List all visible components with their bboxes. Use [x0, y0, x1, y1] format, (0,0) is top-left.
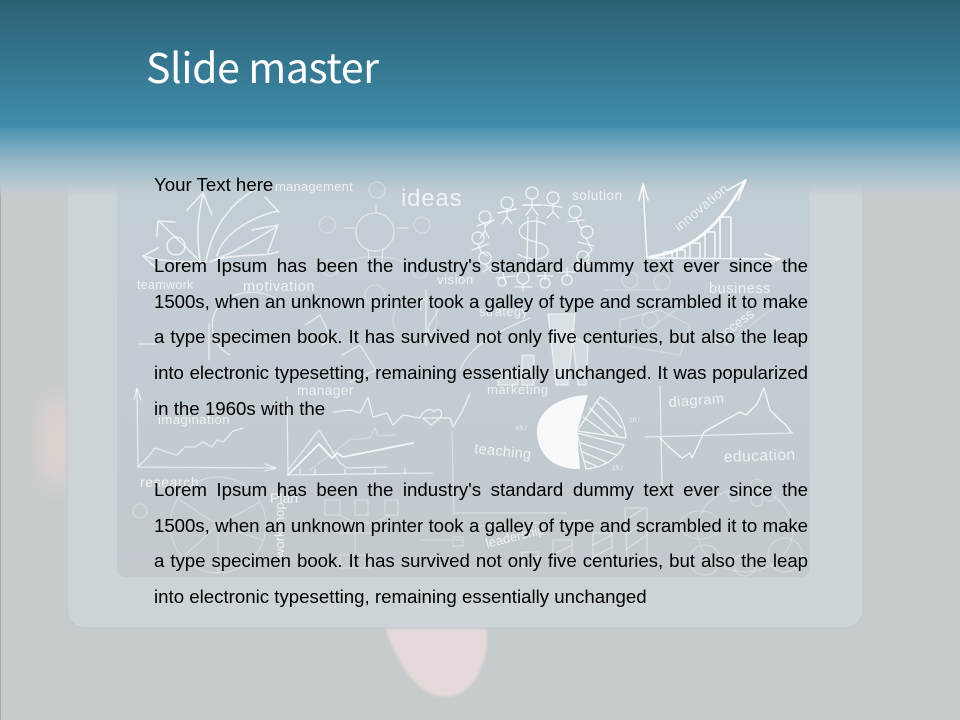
- doodle: pie chart: [537, 395, 626, 469]
- doodle labels: [137, 179, 796, 559]
- doodle labels: business: [709, 281, 771, 297]
- paragraph 1: 1500s, when an unknown printer took a galley of type and scrambled it to make: [154, 291, 808, 312]
- doodle: small charts upper right: [605, 272, 793, 355]
- doodle labels: diagram: [668, 391, 725, 411]
- doodle: innovation growth chart: [639, 180, 780, 264]
- doodle labels: innovation: [671, 181, 731, 234]
- body text block: [154, 174, 808, 607]
- paragraph 1: into electronic typesetting, remaining essentially unchanged. It was popularized: [154, 362, 808, 383]
- paragraph 1: [154, 255, 808, 419]
- left edge line: [0, 127, 1, 720]
- paragraph 1: in the 1960s with the: [154, 398, 325, 419]
- doodle: heartbeat: [333, 393, 470, 427]
- doodle labels: strategy: [479, 304, 529, 319]
- subheading: Your Text here: [154, 174, 273, 195]
- tablet screen: [117, 150, 810, 577]
- doodle labels: ideas: [401, 185, 462, 212]
- doodle labels: research: [140, 474, 199, 490]
- doodle labels: success: [709, 306, 757, 347]
- doodle labels: marketing: [487, 382, 549, 397]
- doodle: imagination line chart: [134, 388, 276, 471]
- doodle labels: teaching: [474, 441, 532, 463]
- doodle: network circles: [680, 479, 802, 576]
- doodle: left bottom pie and flow: [133, 477, 463, 573]
- tablet body: [67, 110, 863, 628]
- header band: [0, 0, 960, 128]
- doodle labels: leadership: [484, 522, 546, 551]
- doodle labels: Plan: [270, 490, 298, 506]
- doodle: centre strategy marks: [138, 290, 588, 385]
- blurred hand behind tablet: [36, 394, 80, 490]
- whiteboard doodles: [133, 179, 802, 576]
- paragraph 1: a type specimen book. It has survived not only five centuries, but also the leap: [154, 326, 808, 347]
- header fade: [0, 127, 960, 197]
- doodle: arrow burst: [143, 190, 279, 268]
- paragraph 2: into electronic typesetting, remaining essentially unchanged: [154, 586, 647, 607]
- doodle labels: motivation: [243, 279, 315, 295]
- doodle: bottom bars: [452, 432, 647, 567]
- paragraph 2: Lorem Ipsum has been the industry's standard dummy text ever since the: [154, 479, 808, 500]
- doodle labels: imagination: [158, 412, 230, 427]
- doodle labels: vision: [437, 272, 474, 287]
- paragraph 2: 1500s, when an unknown printer took a galley of type and scrambled it to make: [154, 515, 808, 536]
- paragraph 1: Lorem Ipsum has been the industry's standard dummy text ever since the: [154, 255, 808, 276]
- doodle labels: solution: [572, 188, 623, 203]
- title: Slide master: [146, 35, 379, 95]
- doodle labels: 15 /: [612, 465, 623, 472]
- doodle labels: education: [724, 447, 796, 466]
- doodle: line graph: [287, 397, 432, 475]
- paragraph 2: a type specimen book. It has survived not only five centuries, but also the leap: [154, 550, 808, 571]
- doodle: light bulbs: [319, 182, 430, 305]
- doodle labels: teamwork: [137, 278, 194, 292]
- doodle labels: 20 /: [629, 417, 640, 424]
- doodle: people ring: [472, 187, 594, 291]
- paragraph 2: [154, 479, 808, 607]
- doodle labels: management: [275, 179, 353, 194]
- fingertip: [386, 629, 487, 697]
- doodle labels: manager: [297, 383, 354, 398]
- doodle labels: 65 /: [516, 425, 527, 432]
- doodle: diagram chart: [645, 386, 793, 485]
- doodle labels: workshop: [272, 502, 287, 559]
